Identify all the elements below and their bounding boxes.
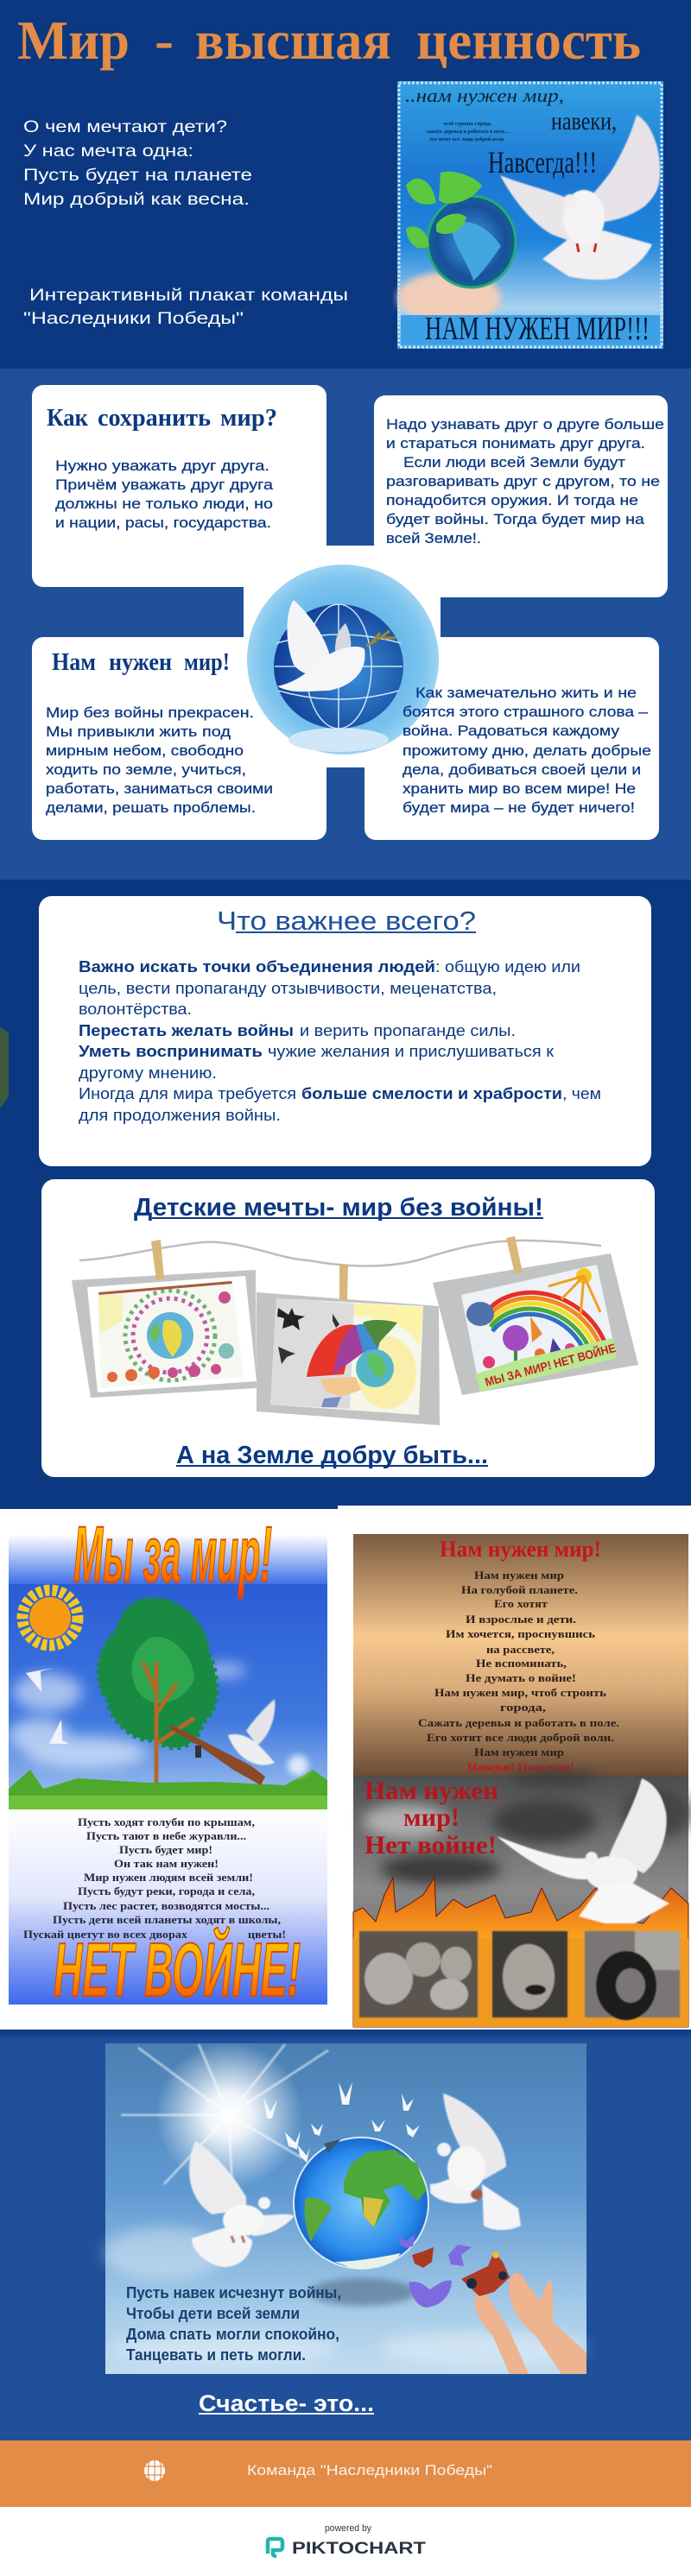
sun — [121, 2042, 328, 2210]
poem: we need peace: Не думать о войне! — [466, 1671, 576, 1684]
section background: how to keep peace — [0, 369, 691, 880]
poem: let wars vanish: Чтобы дети всей земли — [126, 2305, 300, 2322]
text: know each other: будет войны. Тогда будет мир на — [386, 511, 645, 527]
text: find points of unity: и верить пропаганде силы. — [300, 1022, 516, 1039]
butterflies — [397, 2234, 510, 2308]
flames — [353, 1878, 688, 2027]
clipped image edge — [0, 1027, 9, 1108]
text: know each other: и стараться понимать друг друга. — [386, 435, 645, 451]
poem: let wars vanish — [126, 2284, 341, 2364]
text: powered by: powered by — [325, 2523, 371, 2534]
section background: what matters most — [0, 880, 691, 1509]
title: - — [155, 9, 174, 71]
heading: we need peace: Нам — [52, 648, 96, 676]
panel: we need peace background — [32, 637, 326, 840]
clothes peg 2 — [339, 1265, 348, 1300]
text: respect each other — [55, 458, 274, 531]
title: высшая — [195, 9, 391, 71]
text: find points of unity: Иногда для мира требуется — [79, 1085, 296, 1102]
footer band — [0, 2440, 691, 2507]
text: find points of unity: цель, вести пропаганду отзывчивости, меценатства, — [79, 980, 497, 997]
text: know each other: разговаривать друг с другом, то не — [386, 473, 660, 489]
text: how wonderful to live: будет мира – не будет ничего! — [403, 799, 635, 816]
logo: Piktochart icon — [268, 2539, 282, 2556]
text: find points of unity: Важно искать точки объединения людей — [79, 958, 435, 975]
slogan: we need peace, no war: мир! — [403, 1803, 460, 1832]
scene: globe, doves and butterflies — [104, 2042, 587, 2374]
poster panel: we are for peace — [0, 1510, 339, 2030]
intro verse — [23, 118, 252, 209]
poem: we need peace: Его хотят — [494, 1597, 548, 1610]
war photo 1 — [359, 1931, 478, 2017]
hands — [475, 2273, 586, 2374]
poem: let doves walk on roofs: цветы! — [248, 1928, 286, 1941]
poem: let doves walk on roofs: Пусть будут реки, города и села, — [78, 1885, 255, 1897]
war photo 3 — [585, 1931, 680, 2020]
poem: we need peace: Навеки! Навсегда! — [467, 1760, 574, 1773]
heading: how to keep peace: сохранить — [98, 404, 211, 432]
poem: we need peace: Сажать деревья и работать в поле. — [418, 1716, 619, 1729]
poem: we need peace: Им хочется, проснувшись — [446, 1627, 595, 1640]
shadow under earth — [309, 2278, 416, 2306]
text: peace is wonderful: ходить по земле, учиться, — [46, 761, 246, 778]
poem: let doves walk on roofs: Пускай цветут во всех дворах — [23, 1928, 188, 1941]
poem: let doves walk on roofs: Пусть дети всей планеты ходят в школы, — [53, 1913, 281, 1926]
poem: we need peace: Нам нужен мир — [474, 1569, 564, 1582]
poster image: we need peace — [397, 81, 663, 349]
text: how wonderful to live: война. Радоваться каждому — [403, 723, 620, 739]
text: know each other: всей Земле!. — [386, 530, 481, 546]
clothes peg 3 — [506, 1236, 523, 1274]
heading: what matters most: Что важнее всего? — [217, 906, 476, 936]
poem: we need peace: Не вспоминать, — [476, 1657, 567, 1670]
dove right — [430, 2093, 521, 2230]
poster image: we need peace: чтоб строить города, — [443, 121, 492, 127]
heading: we need peace: Нам нужен мир! — [440, 1537, 601, 1562]
text: respect each other: должны не только люди, но — [55, 496, 273, 512]
poem: we need peace: Нам нужен мир, чтоб строить — [434, 1686, 606, 1699]
text: how wonderful to live: дела, добиваться своей цели и — [403, 761, 641, 778]
dove left — [189, 2141, 295, 2267]
intro verse: Мир добрый как весна. — [23, 191, 250, 209]
clothes peg 1 — [151, 1240, 164, 1280]
poem: let doves walk on roofs: Пусть лес растет, возводятся мосты... — [63, 1899, 269, 1912]
poem: let wars vanish: Дома спать могли спокойно, — [126, 2326, 339, 2343]
drawing: umbrella over the globe — [257, 1292, 440, 1425]
poem: let wars vanish: Пусть навек исчезнут войны, — [126, 2284, 341, 2301]
team subtitle — [23, 287, 348, 328]
earth — [294, 2137, 428, 2269]
heading: no war: НЕТ ВОЙНЕ! — [54, 1927, 301, 2012]
heading: we need peace — [52, 648, 230, 676]
text: find points of unity — [79, 958, 601, 1124]
poster image: we need peace: навеки, — [551, 107, 617, 136]
text: how wonderful to live — [403, 685, 651, 816]
text: find points of unity: чужие желания и прислушиваться к — [268, 1043, 554, 1060]
heading: how to keep peace: мир? — [220, 404, 277, 432]
caption: kindness on Earth: А на Земле добру быть... — [176, 1442, 488, 1469]
panel: know each other — [374, 395, 668, 597]
poem: let wars vanish: Танцевать и петь могли. — [126, 2346, 306, 2364]
section background: header — [0, 0, 691, 369]
poem: let doves walk on roofs: Пусть будет мир! — [119, 1843, 212, 1856]
text: find points of unity: для продолжения войны. — [79, 1107, 281, 1124]
poster image: we need peace: ..нам нужен мир, — [405, 85, 564, 106]
text: peace is wonderful: Мир без войны прекрасен. — [46, 704, 254, 721]
drawing: rainbow, we are for peace: МЫ ЗА МИР! НЕТ ВОЙНЕ — [483, 1340, 617, 1389]
text: find points of unity: Перестать желать войны — [79, 1022, 294, 1039]
text: how wonderful to live: Как замечательно жить и не — [415, 685, 637, 701]
heading: we need peace: нужен — [109, 648, 172, 676]
flock of small doves — [263, 2082, 420, 2162]
poem: let doves walk on roofs — [23, 1815, 286, 1941]
drawing: children around the globe — [72, 1270, 257, 1398]
title: ценность — [416, 9, 641, 71]
war photo 2 — [492, 1931, 567, 2017]
intro verse: О чем мечтают дети? — [23, 118, 227, 136]
team subtitle: Интерактивный плакат команды — [29, 287, 348, 305]
poster panel: we are for peace: Мы за мир! — [73, 1511, 272, 1599]
section background: happiness — [0, 2040, 691, 2440]
panel: children's dreams — [41, 1179, 655, 1477]
text: respect each other: Причём уважать друг друга — [55, 477, 274, 493]
poem: we need peace: На голубой планете. — [461, 1583, 578, 1596]
poem: let doves walk on roofs: Пусть ходят голуби по крышам, — [78, 1815, 255, 1828]
team subtitle: "Наследники Победы" — [23, 310, 244, 328]
text: find points of unity: другому мнению. — [79, 1064, 217, 1082]
poem: we need peace — [418, 1569, 619, 1773]
text: know each other: Надо узнавать друг о друге больше — [386, 416, 664, 432]
poem: we need peace: города, — [500, 1701, 546, 1714]
text: know each other: понадобится оружия. И тогда не — [386, 492, 638, 508]
dark band behind posters — [0, 2030, 691, 2040]
image: dove over globe — [244, 546, 441, 767]
text: peace is wonderful: работать, заниматься своими — [46, 780, 273, 797]
logo: Piktochart wordmark: PIKTOCHART — [292, 2540, 426, 2558]
poster image: we need peace: его хотят все люди доброй воли. — [430, 136, 505, 142]
poster panel: we need peace — [338, 1506, 691, 2030]
heading: we need peace: мир! — [184, 648, 230, 676]
intro verse: Пусть будет на планете — [23, 167, 252, 185]
poster image: we need peace: сажать деревья и работать в поле... — [426, 129, 509, 135]
scene: dove over flames and war photos — [353, 1771, 691, 2027]
heading: how to keep peace: Как — [47, 404, 88, 432]
poem: let doves walk on roofs: Пусть тают в небе журавли... — [86, 1829, 246, 1842]
text: how wonderful to live: хранить мир во всем мире! Не — [403, 780, 636, 797]
text: how wonderful to live: боятся этого страшного слова – — [403, 704, 649, 720]
heading: happiness is: Счастье- это... — [199, 2390, 374, 2416]
intro verse: У нас мечта одна: — [23, 142, 193, 161]
text: find points of unity: , чем — [562, 1085, 601, 1102]
panel: what matters most — [39, 896, 651, 1166]
text: know each other — [386, 416, 664, 546]
dove — [497, 1778, 669, 1923]
poem: we need peace: на рассвете, — [486, 1643, 555, 1656]
heading: how to keep peace — [47, 404, 277, 432]
text: find points of unity: больше смелости и храбрости — [301, 1085, 562, 1102]
text: know each other: Если люди всей Земли будут — [403, 454, 625, 470]
scene: tree and dove — [9, 1584, 327, 1809]
poem: let doves walk on roofs: Он так нам нужен! — [114, 1857, 219, 1870]
text: peace is wonderful: делами, решать проблемы. — [46, 799, 256, 816]
poem: we need peace: Нам нужен мир — [474, 1746, 564, 1758]
text: respect each other: Нужно уважать друг друга. — [55, 458, 269, 474]
panel: how to keep peace — [32, 385, 326, 587]
heading: children's dreams: Детские мечты- мир без войны! — [134, 1194, 543, 1222]
poem: we need peace: Его хотят все люди доброй воли. — [427, 1731, 614, 1744]
slogan: we need peace, no war: Нет войне! — [365, 1831, 497, 1859]
drawing: rainbow, we are for peace — [433, 1253, 638, 1395]
text: peace is wonderful — [46, 648, 273, 816]
text: peace is wonderful: Мы привыкли жить под — [46, 723, 231, 740]
slogan: we need peace, no war — [365, 1777, 498, 1859]
white footer — [0, 2507, 691, 2576]
text: find points of unity: : общую идею или — [435, 958, 580, 975]
text: find points of unity: волонтёрства. — [79, 1001, 192, 1018]
text: respect each other: и нации, расы, государства. — [55, 515, 271, 531]
slogan: we need peace, no war: Нам нужен — [365, 1777, 498, 1805]
text: how wonderful to live: прожитому дню, делать добрые — [403, 742, 651, 759]
icon: globe — [144, 2460, 165, 2481]
text: find points of unity: Уметь воспринимать — [79, 1043, 263, 1060]
panel: how wonderful background — [365, 637, 659, 840]
title — [17, 9, 641, 71]
poem: let doves walk on roofs: Мир нужен людям всей земли! — [84, 1871, 253, 1884]
title: Мир — [17, 9, 130, 71]
poster image: we need peace: Навсегда!!! — [488, 145, 597, 180]
clothesline — [79, 1241, 601, 1266]
footer team name: Команда "Наследники Победы" — [247, 2462, 492, 2478]
text: peace is wonderful: мирным небом, свободно — [46, 742, 244, 759]
poem: we need peace: И взрослые и дети. — [466, 1613, 576, 1626]
